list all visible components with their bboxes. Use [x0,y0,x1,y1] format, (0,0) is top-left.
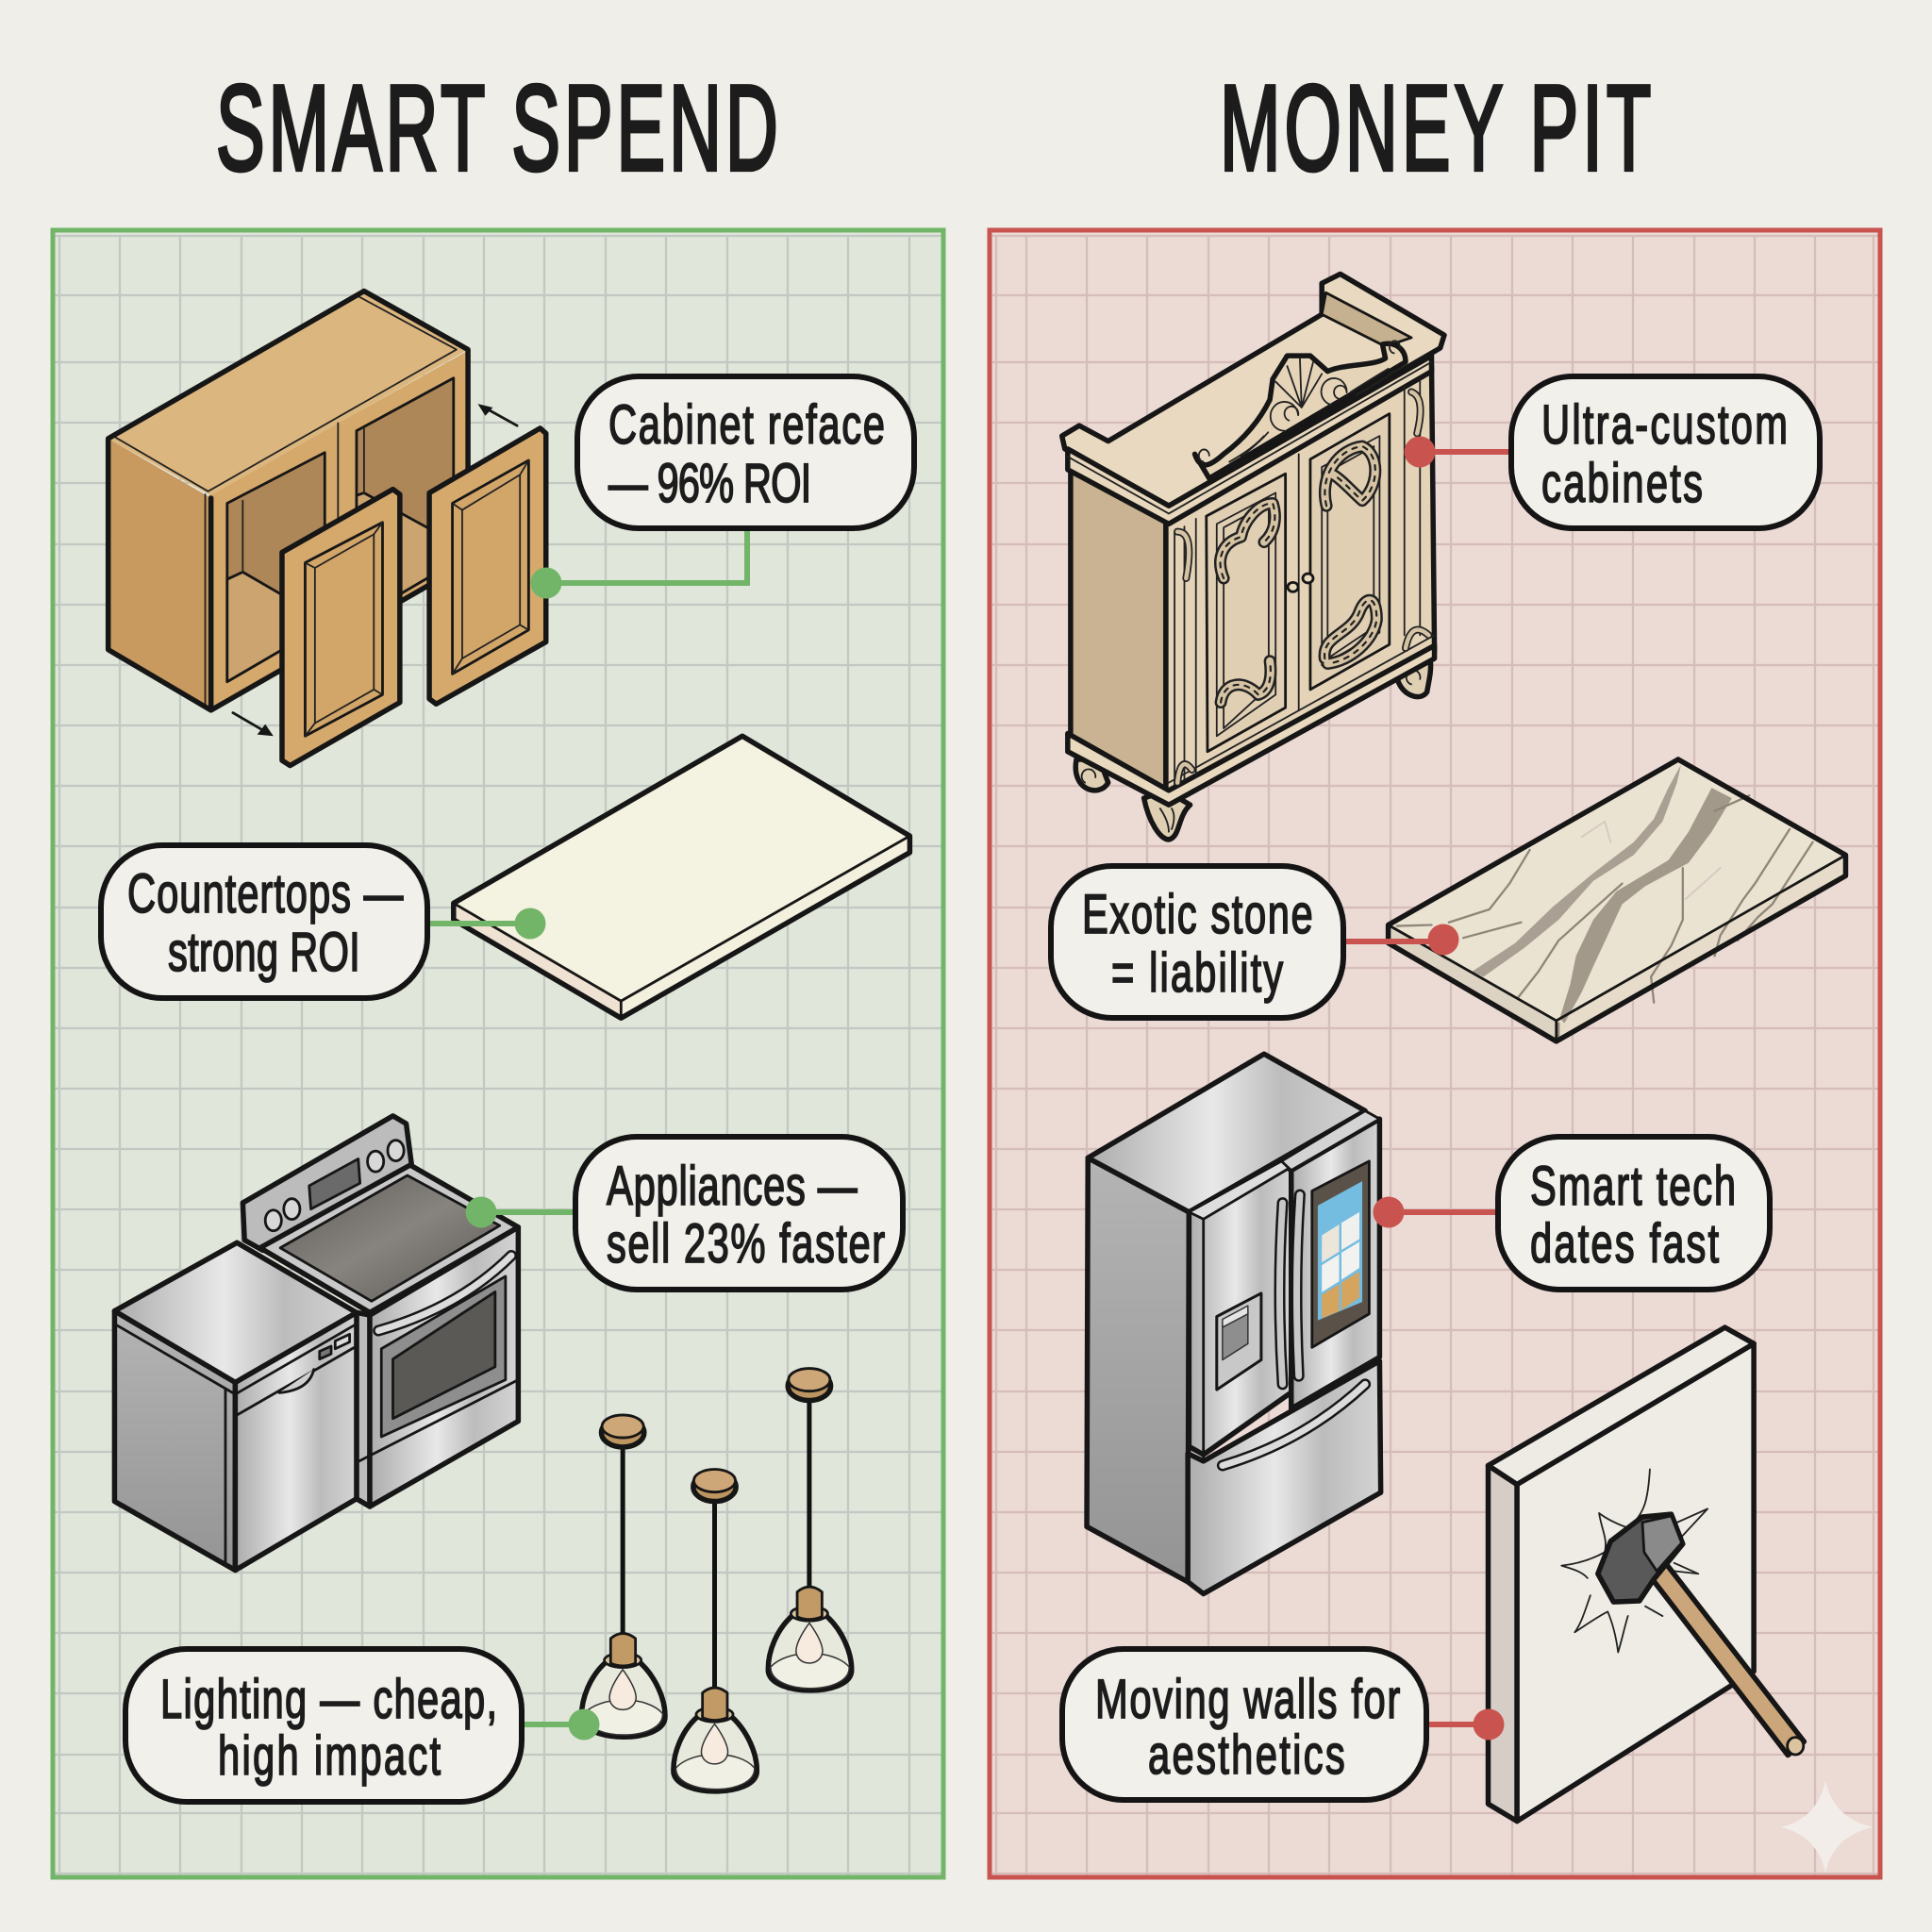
pendant 1 [582,1415,665,1737]
panel: smart spend [53,230,943,1877]
callout: moving walls [1062,1649,1426,1800]
pendant 3 [768,1369,852,1690]
callout: ultra-custom cabinets [1511,376,1820,528]
callout: lighting: Lighting — cheap, [160,1668,497,1730]
callout: exotic stone: = liability [1111,941,1284,1004]
callout: lighting: high impact [218,1724,441,1787]
connector: ultra-custom cabinets [1404,436,1511,468]
pediment carving [1195,341,1406,478]
icon: pendant lights [582,1369,852,1791]
callout: smart tech: Smart tech [1530,1155,1736,1217]
icon: dishwasher and range [114,1116,518,1570]
callout: countertops: Countertops — [127,862,404,924]
connector: cabinet reface [530,528,747,598]
connector: appliances [466,1196,575,1228]
callout: exotic stone: Exotic stone [1082,883,1313,945]
door carvings [1177,392,1428,783]
callout: appliances [575,1137,903,1290]
callout: smart tech [1498,1137,1770,1290]
callout: lighting [125,1649,522,1802]
icon: smart fridge [1087,1054,1381,1593]
icon: countertop [454,736,909,1018]
callout: appliances: Appliances — [607,1155,858,1217]
connector: countertops [427,908,545,940]
callout: moving walls: Moving walls for [1095,1668,1400,1730]
connector: exotic stone [1343,924,1458,955]
connector: smart tech [1374,1196,1498,1228]
pendant 2 [674,1470,757,1791]
callout: cabinet reface [577,376,914,528]
callout: smart tech: dates fast [1530,1212,1719,1274]
callout: exotic stone [1051,866,1343,1018]
callout: countertops: strong ROI [168,921,360,983]
callout: appliances: sell 23% faster [607,1212,885,1274]
panel: money pit [990,230,1880,1877]
icon: marble slab [1389,759,1845,1041]
title: smart spend: SMART SPEND [216,60,778,196]
connector: moving walls [1426,1709,1504,1740]
watermark sparkle [1781,1781,1874,1873]
callout: moving walls: aesthetics [1148,1724,1345,1786]
icon: wall with sledgehammer [1489,1327,1804,1822]
icon: cabinet reface [108,291,546,766]
callout: countertops [101,845,427,998]
title: money pit: MONEY PIT [1220,60,1651,196]
callout: ultra-custom cabinets: cabinets [1541,452,1703,514]
icon: ornate cabinet [1062,274,1444,840]
callout: ultra-custom cabinets: Ultra-custom [1541,393,1788,456]
callout: cabinet reface: Cabinet reface [608,393,885,456]
connector: lighting [522,1709,600,1740]
marble veins [1397,764,1813,1041]
callout: cabinet reface: — 96% ROI [608,452,811,514]
